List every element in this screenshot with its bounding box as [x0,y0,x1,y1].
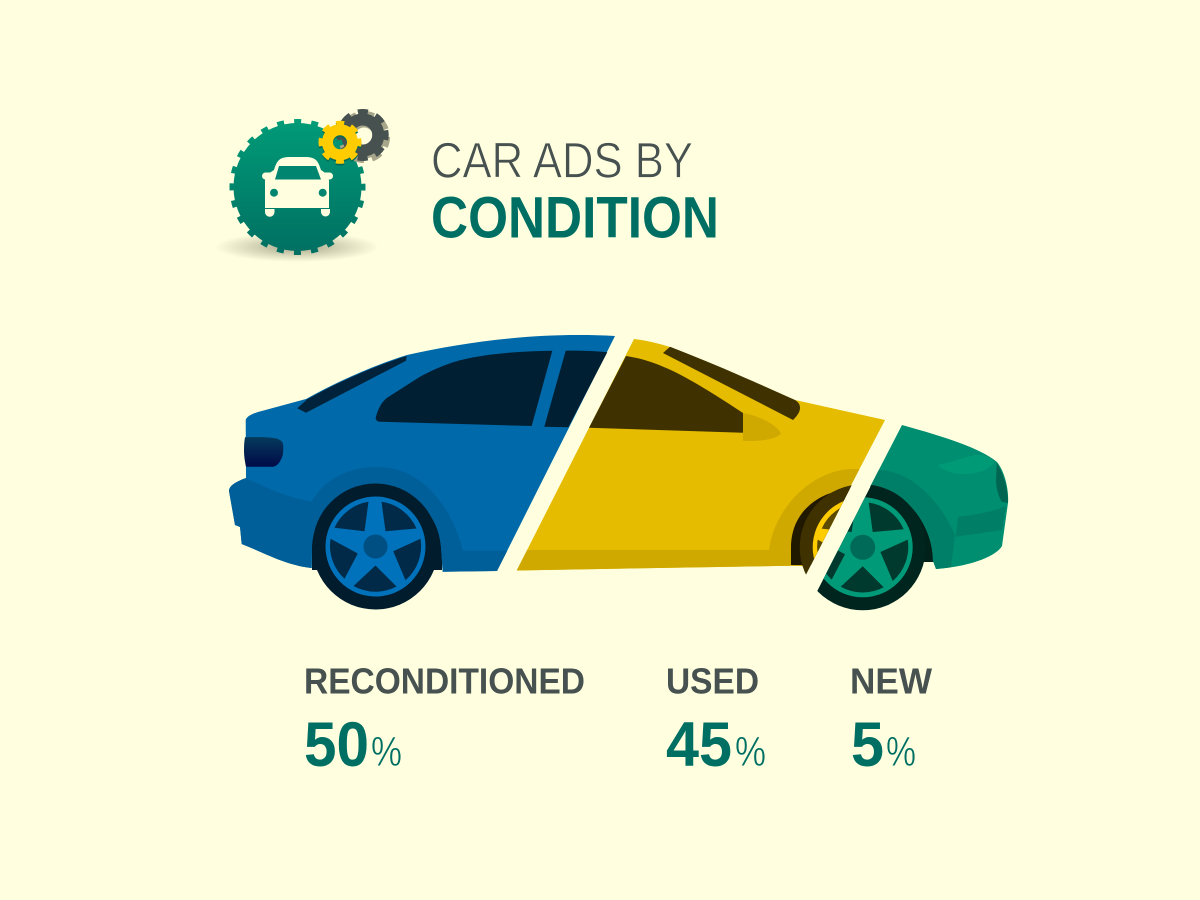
label: NEW [850,660,932,701]
label: USED [666,660,759,701]
front arch dark [791,489,850,565]
value: 5 [851,710,884,780]
tail light [244,437,283,467]
bonnet highlight [938,455,994,474]
percent sign: % [886,728,916,775]
percent sign: % [371,728,402,775]
value: 50 [304,710,369,780]
roof strip [663,347,800,420]
badge disc [234,123,362,251]
icon: yellow gear [322,124,358,162]
panel: new green car section [800,425,1008,610]
darker arch band [870,470,955,569]
bumper lip [956,506,1006,537]
wing mirror [743,413,781,441]
percent sign: % [735,728,766,775]
darker lower band and arch [516,469,860,570]
title line 1: CAR ADS BY [431,132,693,188]
rear window [376,351,552,426]
title [431,132,719,251]
label: RECONDITIONED [304,660,585,701]
icon: white car front [262,157,333,217]
green body [870,425,1008,569]
darker lower band [229,467,507,572]
panel: reconditioned blue car section [229,335,615,610]
legend: reconditioned [304,660,585,780]
front arch dark [860,487,934,562]
badge shadow [215,232,379,262]
value: 45 [666,710,732,780]
legend: new [850,660,932,780]
rear wheel [312,484,438,610]
panel: used yellow car section [516,339,885,574]
blue body [229,335,615,572]
door window [544,351,607,427]
windscreen [589,356,743,433]
car [229,335,1008,610]
yellow body [517,339,885,570]
legend: used [666,660,766,780]
rear wheel arch dark [312,500,442,570]
icon: gear badge with car [215,113,386,262]
headlight [996,463,1008,503]
rear spoiler strip [297,356,407,413]
title line 2: CONDITION [431,186,719,251]
icon: dark gear [341,113,386,159]
front wheel yellow half [800,485,852,574]
badge teeth [232,122,363,252]
front wheel green half [817,485,924,610]
